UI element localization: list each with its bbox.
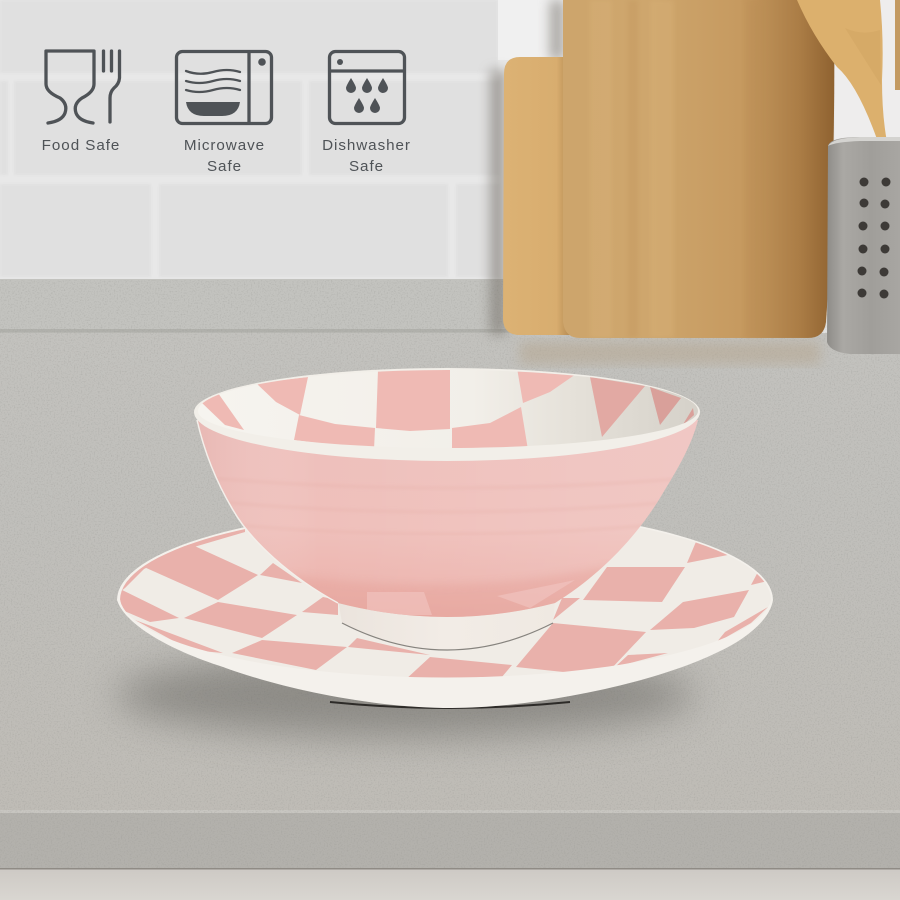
- label: food safe: Food Safe: [42, 137, 120, 154]
- kitchen counter top: [0, 333, 900, 811]
- bowl rim and interior: [194, 368, 700, 461]
- plate shadow: [115, 653, 695, 737]
- floor strip under counter: [0, 868, 900, 900]
- wooden cutting boards: [503, 0, 834, 338]
- utensils in holder: [797, 0, 900, 142]
- counter front edge: [0, 810, 900, 868]
- label: microwave safe: Safe: [207, 158, 242, 175]
- bowl foot ring: [338, 600, 555, 650]
- safety icons row: [42, 51, 411, 175]
- label: dishwasher safe: Safe: [349, 158, 384, 175]
- shadows cast by the boards on the wall: [490, 0, 564, 334]
- counter speckle texture: [0, 280, 900, 868]
- bowl outer body: [190, 420, 705, 630]
- icon: food safe glass and fork: [46, 51, 120, 123]
- background: white tiled wall: [0, 0, 900, 285]
- backsplash ledge: [0, 279, 560, 333]
- label: dishwasher safe: Dishwasher: [322, 137, 411, 154]
- plate with pink checker pattern: [117, 508, 773, 708]
- counter reflection below boards: [520, 342, 820, 364]
- icon: dishwasher safe: [330, 52, 404, 124]
- icon: microwave safe: [176, 52, 272, 124]
- label: microwave safe: Microwave: [184, 137, 265, 154]
- steel utensil holder: [827, 137, 900, 354]
